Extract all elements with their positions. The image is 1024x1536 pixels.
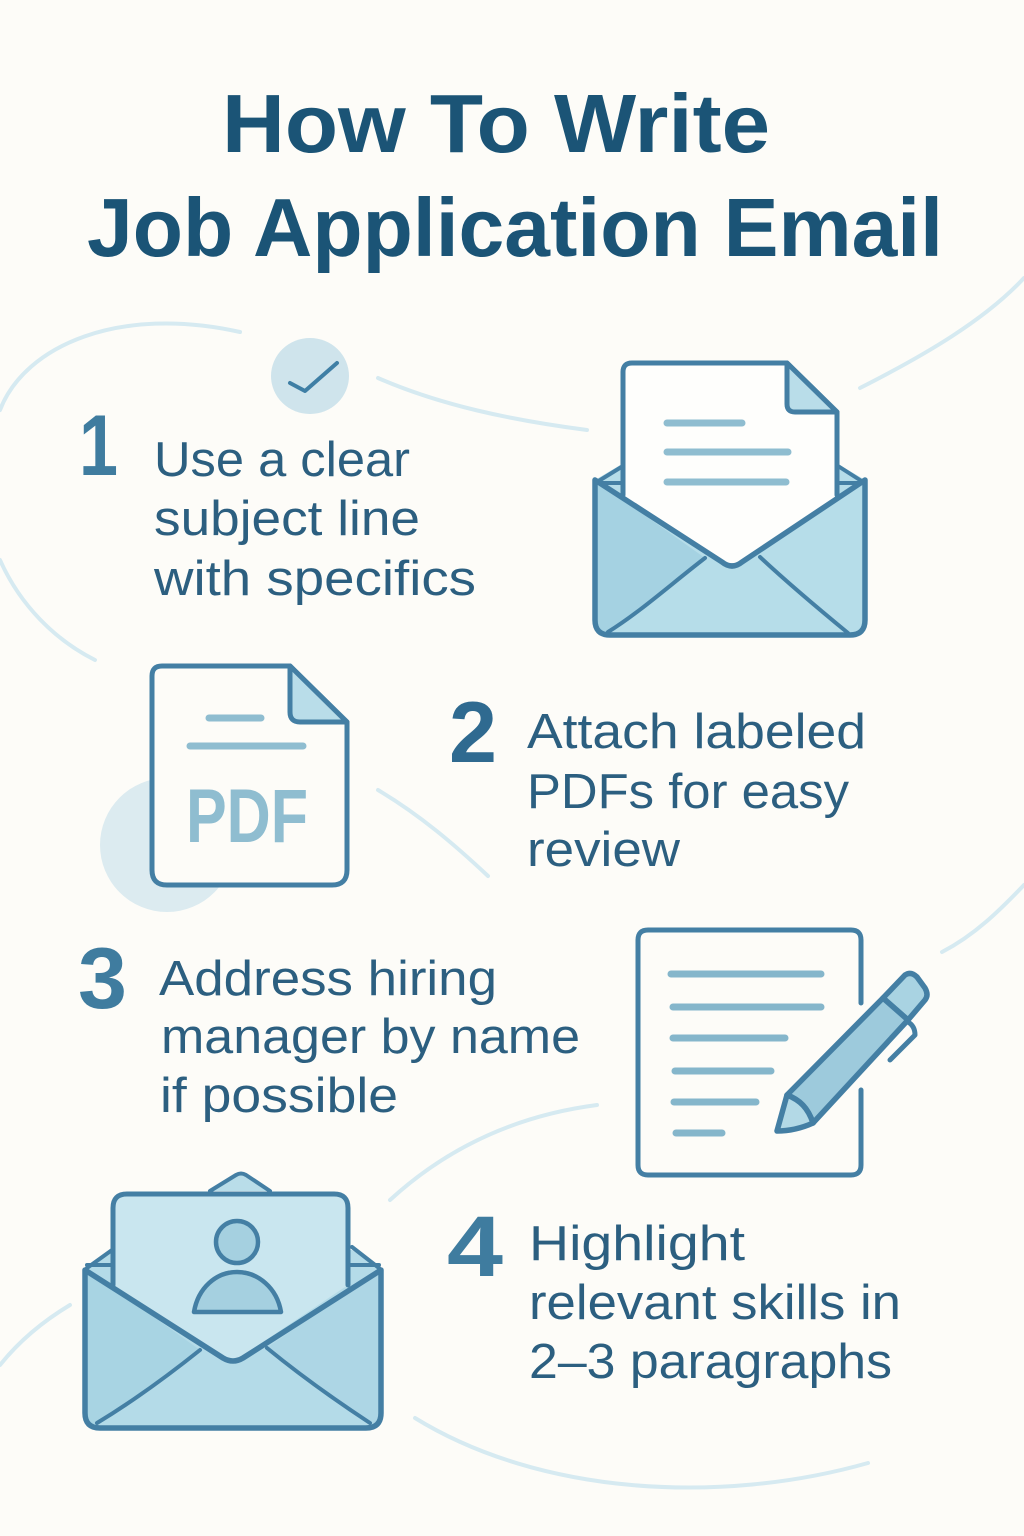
step 4 text: relevant skills in (529, 1276, 901, 1330)
step 3 text: manager by name (161, 1010, 580, 1064)
envelope outline (85, 1270, 381, 1428)
step 3 text: Address hiring (159, 952, 497, 1006)
step 2 text: review (527, 823, 681, 877)
icon: envelope with profile card (85, 1174, 381, 1428)
step 1 text: Use a clear (154, 433, 410, 487)
step 4 text (529, 1217, 901, 1389)
step 1 text (153, 433, 476, 606)
document lines (190, 718, 303, 746)
envelope outline (595, 480, 865, 635)
top flap (210, 1174, 270, 1191)
step 1 text: with specifics (153, 552, 476, 606)
step 3 number: 3 (78, 931, 127, 1027)
profile avatar (194, 1221, 281, 1312)
step 2 number: 2 (449, 685, 497, 781)
icon: envelope with letter (595, 363, 865, 635)
step 1 text: subject line (154, 492, 420, 546)
icon: document with pen (638, 930, 927, 1175)
step 3 text (159, 952, 580, 1123)
step 4 text: 2–3 paragraphs (529, 1335, 892, 1389)
page fold (290, 666, 347, 722)
title (87, 77, 943, 274)
envelope folds (97, 1348, 370, 1423)
letter sheet (623, 363, 837, 568)
PDF label: PDF (186, 774, 308, 859)
step 2 text (527, 705, 866, 877)
step 4 text: Highlight (529, 1217, 745, 1271)
step 2 text: Attach labeled (527, 705, 866, 759)
pen (777, 973, 927, 1131)
title: Job Application Email (87, 181, 943, 274)
step 4 number: 4 (447, 1199, 503, 1295)
envelope folds (608, 557, 848, 633)
profile card (113, 1194, 348, 1362)
icon: check badge (271, 338, 349, 414)
icon: PDF document (100, 666, 347, 912)
title: How To Write (222, 77, 770, 170)
step 2 text: PDFs for easy (527, 765, 850, 819)
step 3 text: if possible (160, 1069, 398, 1123)
letter lines (667, 423, 788, 482)
page fold (787, 363, 837, 412)
document lines (671, 974, 821, 1133)
step 1 number: 1 (79, 398, 118, 494)
